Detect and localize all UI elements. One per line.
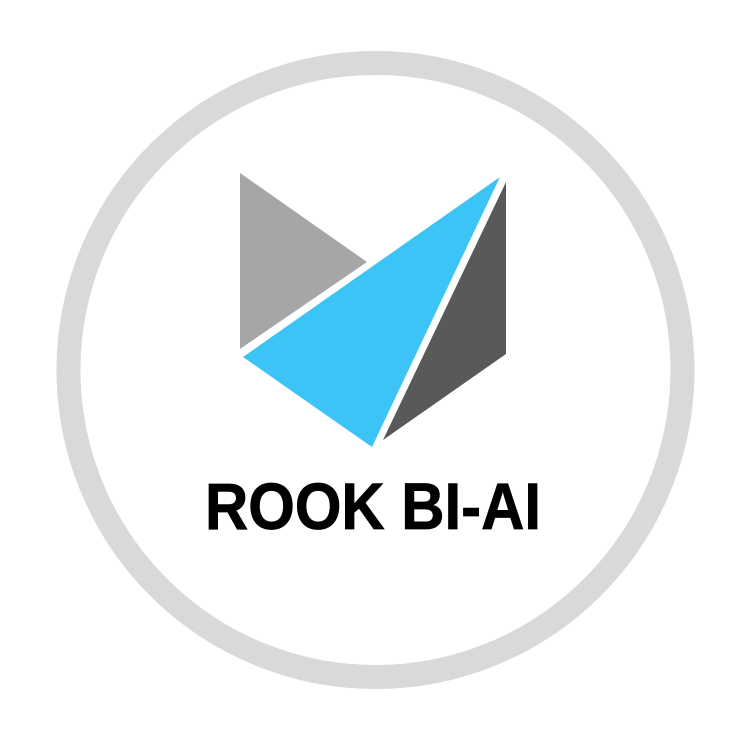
blue triangle [243,177,500,447]
dark grey triangle [383,182,506,440]
brand name: ROOK BI-AI [205,469,541,543]
grey circle ring [68,63,682,677]
light grey triangle [240,173,367,349]
logo mark [240,173,506,447]
